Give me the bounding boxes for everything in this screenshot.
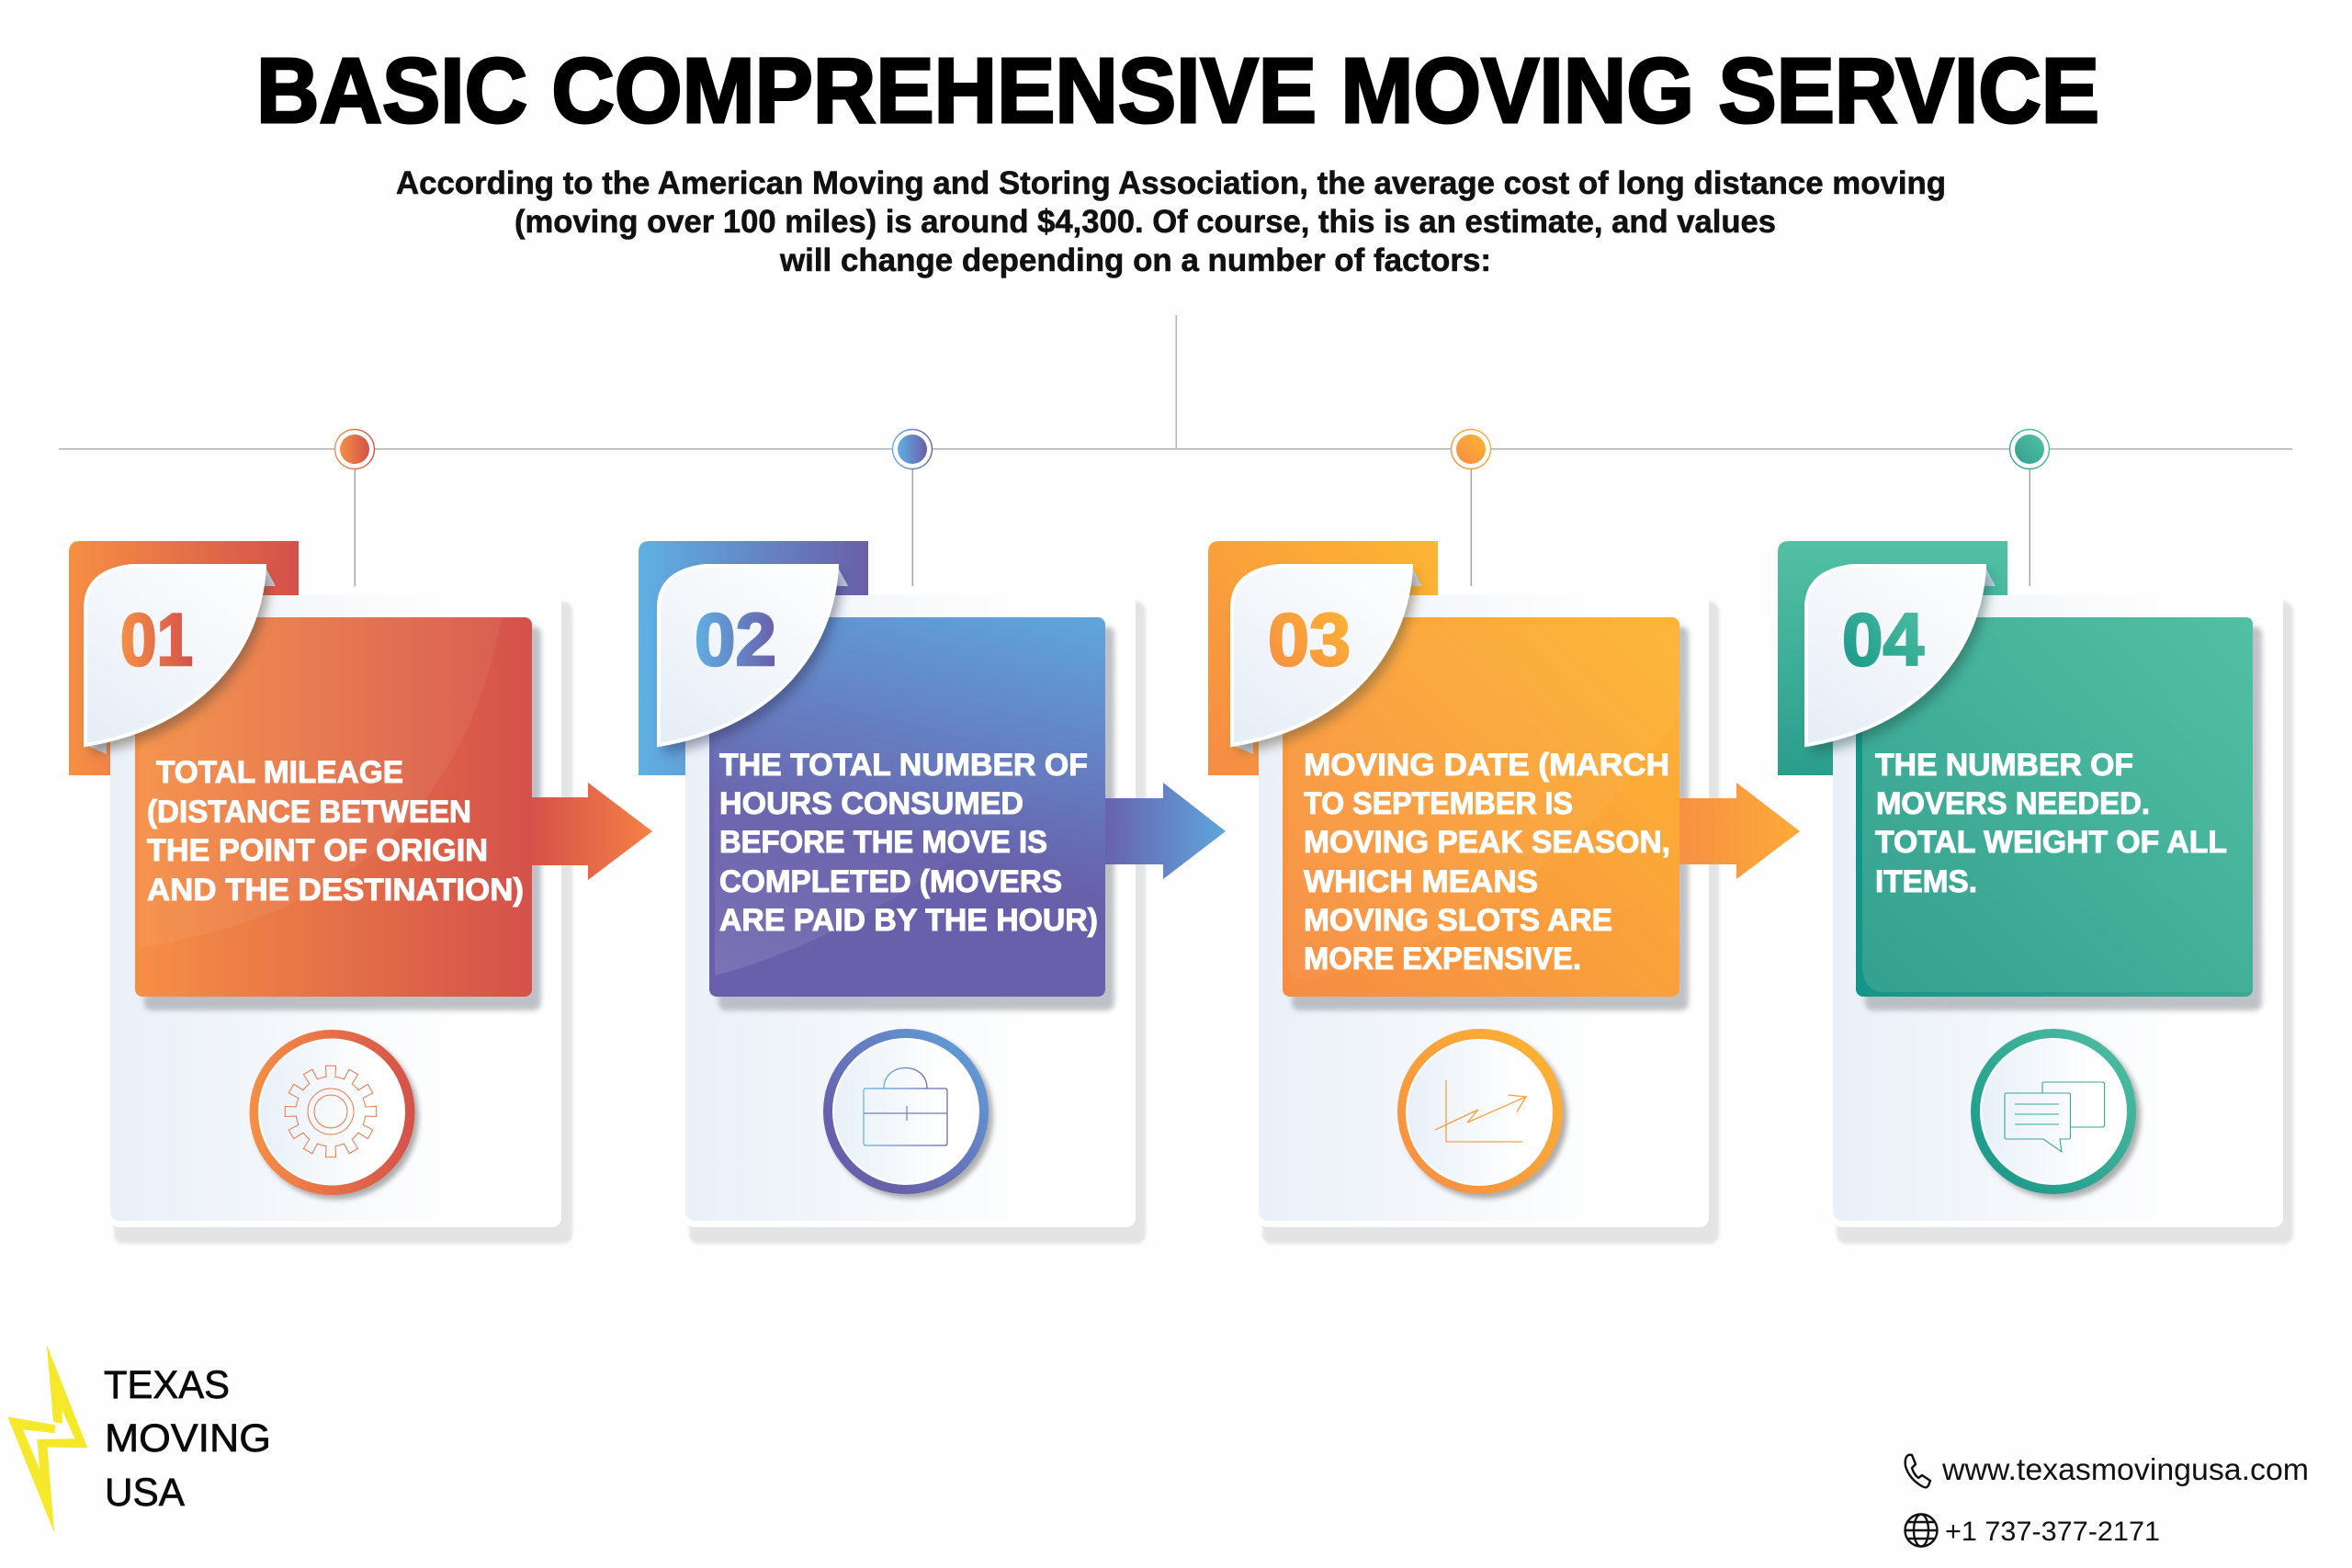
- text: moving date: [1304, 748, 1670, 976]
- colored text panel 2: [709, 617, 1105, 997]
- text: number of movers and weight: ITEMS.: [1875, 864, 1977, 899]
- panel: step 1 total mileage: [69, 541, 652, 1244]
- logo wordmark: USA: [105, 1471, 185, 1515]
- text: total hours: HOURS CONSUMED: [719, 786, 1023, 821]
- text: moving date: TO SEPTEMBER IS: [1304, 786, 1573, 821]
- text: total mileage: (DISTANCE BETWEEN: [147, 795, 471, 829]
- intro text block: will change depending on a number of factors:: [779, 243, 1491, 278]
- text: total mileage: AND THE DESTINATION): [147, 873, 524, 908]
- text: total hours: [719, 748, 1098, 938]
- title: BASIC COMPREHENSIVE MOVING SERVICE: [256, 39, 2099, 142]
- intro text block: According to the American Moving and Storing Association, the average cost of long distance moving: [396, 165, 1946, 201]
- icon: phone: [1905, 1455, 1930, 1487]
- timeline dot 1: [334, 430, 375, 468]
- number badge 01: 01: [120, 599, 193, 682]
- colored text panel 1: [135, 617, 532, 997]
- arrow: step 1 to 2: [528, 783, 652, 880]
- text: number of movers and weight: THE NUMBER OF: [1875, 748, 2133, 783]
- text: moving date: MOVING PEAK SEASON,: [1304, 825, 1670, 860]
- intro text block: (moving over 100 miles) is around $4,300. Of course, this is an estimate, and values: [514, 204, 1776, 240]
- contact: phone number: +1 737-377-2171: [1945, 1517, 2160, 1547]
- colored text panel 3: [1283, 617, 1679, 997]
- panel: step 3 moving date: [1208, 541, 1800, 1244]
- icon: briefcase badge: [823, 1029, 993, 1199]
- text: moving date: WHICH MEANS: [1304, 864, 1538, 899]
- panel: step 4 number of movers: [1778, 541, 2293, 1244]
- logo wordmark: TEXAS: [104, 1363, 230, 1407]
- text: total hours: COMPLETED (MOVERS: [719, 864, 1062, 899]
- arrow: step 3 to 4: [1676, 783, 1800, 879]
- logo wordmark: MOVING: [105, 1416, 271, 1461]
- timeline connector: [59, 315, 2292, 586]
- number badge 04: 04: [1842, 599, 1924, 682]
- logo wordmark: [104, 1363, 271, 1515]
- number badge 02: [659, 566, 848, 753]
- text: number of movers and weight: [1875, 748, 2227, 899]
- text: total mileage: [147, 755, 524, 908]
- text: moving date: MOVING SLOTS ARE: [1304, 903, 1612, 938]
- icon: chat bubbles badge: [1971, 1029, 2141, 1199]
- intro text block: [396, 165, 1946, 278]
- number badge 03: [1232, 566, 1422, 754]
- icon: growth chart badge: [1397, 1029, 1567, 1199]
- number badge 01: [85, 566, 276, 754]
- number badge 03: 03: [1268, 599, 1351, 682]
- text: total hours: BEFORE THE MOVE IS: [719, 825, 1047, 860]
- icon: gear badge: [250, 1030, 419, 1200]
- arrow: step 2 to 3: [1102, 783, 1226, 879]
- contact: website: www.texasmovingusa.com: [1941, 1452, 2309, 1486]
- colored text panel 4: [1856, 617, 2253, 997]
- number badge 02: 02: [695, 599, 776, 682]
- icon: globe: [1905, 1514, 1937, 1547]
- text: total hours: THE TOTAL NUMBER OF: [719, 748, 1088, 783]
- text: total hours: ARE PAID BY THE HOUR): [719, 903, 1098, 938]
- number badge 04: [1806, 566, 1996, 753]
- panel: step 2 total hours: [639, 541, 1226, 1244]
- timeline dot 2: [893, 430, 932, 468]
- timeline dot 4: [2010, 430, 2049, 468]
- text: moving date: MORE EXPENSIVE.: [1304, 942, 1581, 976]
- text: number of movers and weight: TOTAL WEIGHT OF ALL: [1875, 825, 2227, 860]
- text: total mileage: TOTAL MILEAGE: [156, 755, 403, 790]
- timeline dot 3: [1452, 430, 1490, 468]
- icon: lightning bolt: [7, 1345, 87, 1533]
- text: number of movers and weight: MOVERS NEEDED.: [1876, 786, 2150, 821]
- text: moving date: MOVING DATE (MARCH: [1304, 748, 1669, 783]
- logo: Texas Moving USA: [7, 1345, 271, 1533]
- text: total mileage: THE POINT OF ORIGIN: [147, 833, 488, 868]
